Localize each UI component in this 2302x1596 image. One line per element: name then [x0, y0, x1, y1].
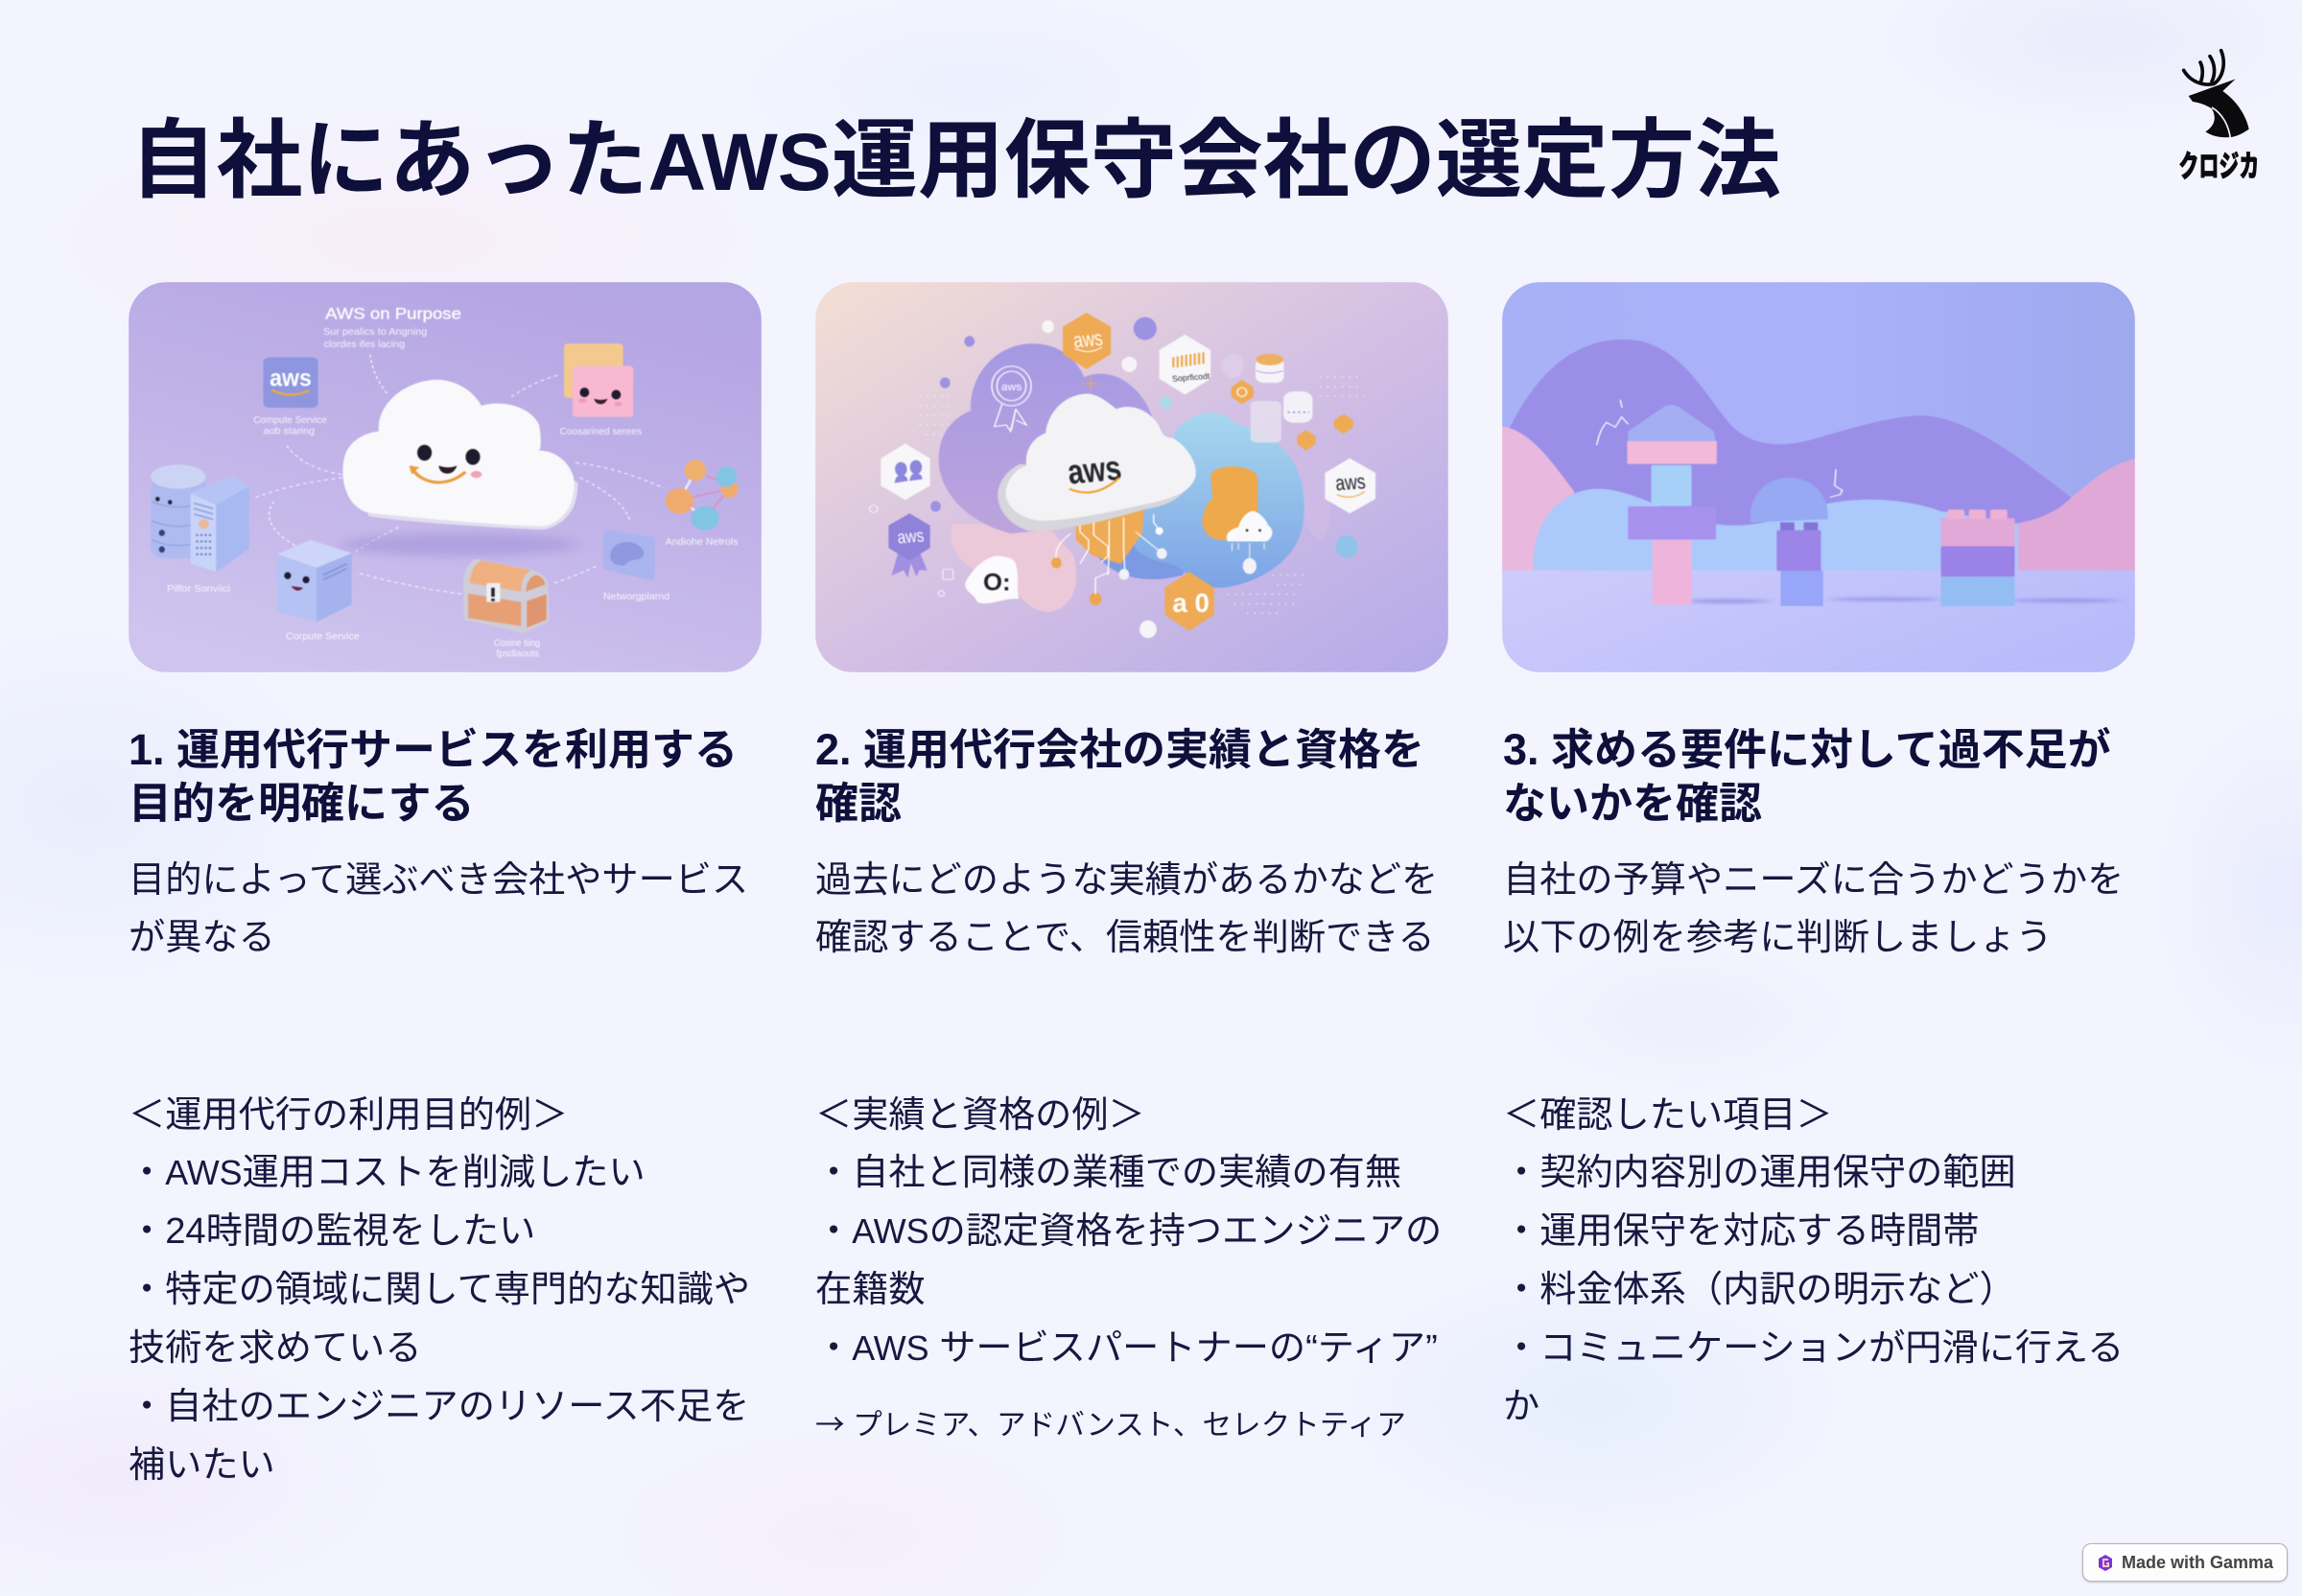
icon: certificate badge — [992, 366, 1031, 432]
label texts: Sur pealics to Angning — [323, 326, 427, 337]
note: partner tiers: → プレミア、アドバンスト、セレクトティア — [815, 1401, 1406, 1443]
label texts: Compute Service — [253, 413, 327, 425]
icon: O: badge — [965, 556, 1020, 603]
icon: barcode hexagon: Soprficodt — [1172, 372, 1210, 384]
column 2 text — [815, 0, 1468, 1596]
description 3: 以下の例を参考に判断しましょう — [1503, 917, 2053, 958]
icon: aws tile: aws — [270, 364, 312, 391]
column 1 text — [129, 725, 750, 1486]
description 1 — [129, 859, 748, 958]
badge: Made with Gamma — [2082, 1543, 2288, 1582]
icon: treasure chest — [463, 559, 549, 633]
label texts — [167, 305, 739, 659]
icon: database cylinders — [1251, 354, 1312, 442]
orange circuit board — [1076, 508, 1144, 564]
column 3 text: ないかを確認 — [1503, 779, 1762, 828]
label texts: Coosarined serees — [560, 426, 642, 437]
list 1 — [129, 1093, 750, 1486]
icon: aws ribbon: aws — [896, 526, 926, 548]
list 2: ・AWSの認定資格を持つエンジニアの — [815, 1210, 1442, 1252]
label texts: AWS on Purpose — [325, 305, 461, 323]
block tower left — [1627, 405, 1717, 604]
heading 3: 3. 求める要件に対して過不足が — [1503, 725, 2111, 774]
list 3 — [1503, 1086, 2124, 1437]
description 2: 確認することで、信頼性を判断できる — [815, 917, 1435, 958]
icon: compute box — [277, 540, 352, 622]
title: 自社にあったAWS運用保守会社の選定方法 — [130, 113, 1781, 209]
label texts: fpsdlaouts — [497, 647, 539, 659]
icon: a0 hexagon — [1164, 572, 1214, 631]
icon: smiling cloud — [339, 380, 577, 556]
list 1: ・24時間の監視をしたい — [129, 1210, 535, 1252]
list 1: 技術を求めている — [129, 1327, 422, 1369]
icon: small orange hexagons — [1232, 380, 1353, 451]
description 2: 過去にどのような実績があるかなどを — [815, 859, 1438, 900]
logo: Kuroshika deer — [2178, 48, 2259, 183]
blue hill — [1534, 489, 2018, 572]
dashed connectors — [255, 355, 664, 594]
list 1: ＜運用代行の利用目的例＞ — [129, 1093, 568, 1136]
label texts: Cosine tiing — [494, 637, 540, 648]
list 1: ・自社のエンジニアのリソース不足を — [129, 1386, 749, 1427]
purple hills — [1510, 340, 2071, 540]
label texts: Andiohe Netrols — [666, 536, 739, 548]
icon: decorative spheres — [870, 317, 1358, 638]
icon: team hexagon — [881, 443, 930, 500]
description 3: 自社の予算やニーズに合うかどうかを — [1503, 859, 2124, 900]
pink blob — [951, 524, 1076, 612]
pink hills — [1502, 427, 1575, 572]
block shadows — [1683, 598, 2121, 603]
icon: database and server tower — [151, 464, 249, 572]
list 3: か — [1503, 1386, 1539, 1427]
icon: barcode hexagon — [1160, 335, 1210, 394]
icon: aws tile — [263, 358, 318, 408]
badge: Made with Gamma: Made with Gamma — [2122, 1553, 2273, 1572]
list 2: ＜実績と資格の例＞ — [815, 1093, 1145, 1136]
label texts: clordes ifes lacing — [323, 339, 405, 350]
panel: image 2 AWS certifications — [815, 282, 1448, 672]
list 1: ・特定の領域に関して専門的な知識や — [129, 1269, 750, 1310]
description 2 — [815, 852, 1438, 968]
icon: white aws hexagon — [1325, 458, 1375, 513]
icon: antlers — [2184, 51, 2223, 84]
icon: deer head — [2189, 79, 2249, 138]
icon: orange shape with small cloud — [1202, 466, 1272, 575]
list 2: ・自社と同様の業種での実績の有無 — [815, 1152, 1401, 1193]
label texts: Corpute Service — [286, 630, 360, 642]
icon: main aws cloud: aws — [1065, 449, 1124, 492]
icon: network tile — [603, 530, 655, 580]
block tower middle — [1750, 478, 1828, 606]
column 1 text: 目的を明確にする — [129, 779, 474, 828]
icon: aws ribbon — [888, 513, 930, 577]
purple cloud — [939, 343, 1153, 533]
list 1: 補いたい — [129, 1444, 275, 1486]
icon: orange aws hexagon — [1063, 313, 1111, 369]
list 3: ＜確認したい項目＞ — [1503, 1093, 1833, 1136]
list 2 — [815, 1086, 1442, 1378]
icon: certificate badge: aws — [1001, 381, 1022, 393]
block stack right — [1941, 509, 2014, 606]
list 2: ・AWS サービスパートナーの“ティア” — [815, 1327, 1438, 1369]
sparkle marks — [1597, 400, 1843, 497]
icon: pink and yellow cards — [564, 343, 633, 417]
label texts: Networgplarnd — [603, 591, 669, 602]
blue blob — [1097, 540, 1191, 579]
list 1: ・AWS運用コストを削減したい — [129, 1152, 646, 1193]
logo wordmark: クロジカ — [2178, 150, 2259, 183]
description 1: が異なる — [129, 917, 275, 958]
icon: main aws cloud — [998, 393, 1196, 531]
list 3: ・運用保守を対応する時間帯 — [1503, 1210, 1979, 1252]
column 2 text: 確認 — [815, 779, 902, 828]
icon: gamma logo — [2097, 1554, 2114, 1572]
dot patterns — [920, 377, 1365, 613]
list 3: ・料金体系（内訳の明示など） — [1503, 1269, 2016, 1310]
list 3: ・契約内容別の運用保守の範囲 — [1503, 1152, 2016, 1193]
list 3: ・コミュニケーションが円滑に行える — [1503, 1327, 2124, 1369]
description 1: 目的によって選ぶべき会社やサービス — [129, 859, 748, 900]
icon: orange aws hexagon: aws — [1071, 326, 1104, 352]
heading 1: 1. 運用代行サービスを利用する — [129, 725, 738, 774]
icon: molecule — [666, 459, 738, 530]
icon: a0 hexagon: a 0 — [1172, 588, 1210, 619]
column 3 text — [1503, 0, 2155, 1596]
floor — [1502, 571, 2135, 672]
panel: image 3 building blocks — [1502, 282, 2135, 672]
icon: white aws hexagon: aws — [1334, 469, 1367, 495]
blue cloud — [1132, 412, 1304, 588]
heading 1 — [129, 725, 738, 828]
list 2: 在籍数 — [815, 1269, 926, 1310]
icon: O: badge: O: — [983, 570, 1011, 596]
label texts: aob staring — [263, 425, 315, 436]
label texts: Pilfor Sonviici — [167, 583, 230, 594]
description 3 — [1503, 852, 2124, 968]
heading 2: 2. 運用代行会社の実績と資格を — [815, 725, 1424, 774]
panel: image 1 AWS on Purpose — [129, 282, 762, 672]
lavender haze — [1294, 431, 1337, 538]
